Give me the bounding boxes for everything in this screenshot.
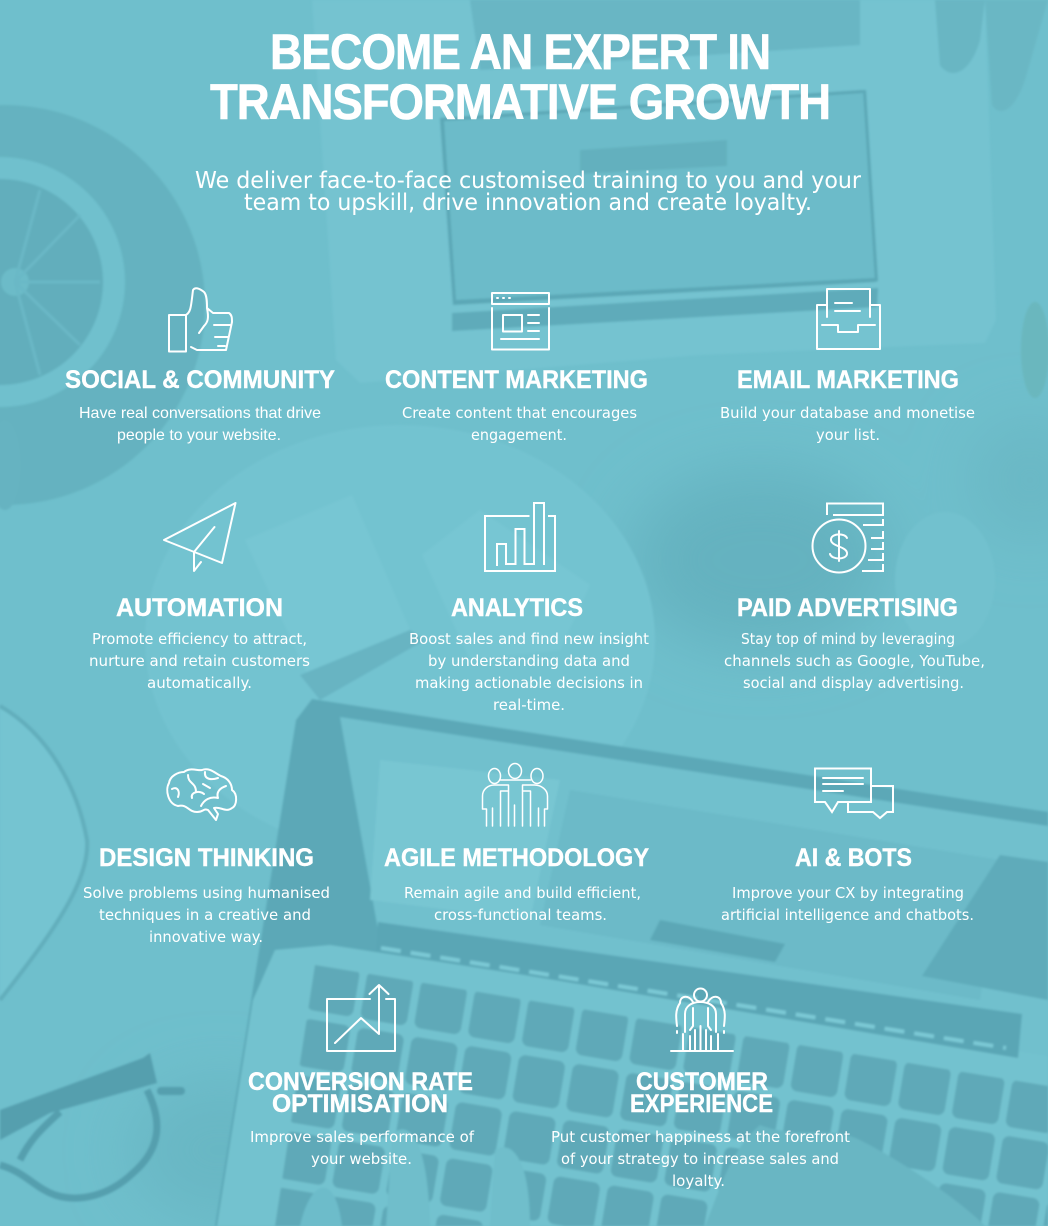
heading: SOCIAL & COMMUNITY xyxy=(65,366,335,394)
heading: AUTOMATION xyxy=(116,594,283,622)
icon: team of people xyxy=(482,764,548,826)
panel: automation xyxy=(89,503,310,692)
description: social and display advertising. xyxy=(743,674,964,692)
description: nurture and retain customers xyxy=(89,652,310,670)
description xyxy=(724,630,985,692)
panel: social & community xyxy=(65,288,335,444)
panel: agile methodology xyxy=(384,764,649,924)
icon: paper plane xyxy=(164,503,236,571)
heading: CONVERSION RATE xyxy=(248,1068,473,1096)
icon: thumbs up xyxy=(169,288,232,352)
description: Improve your CX by integrating xyxy=(732,884,964,902)
description: by understanding data and xyxy=(428,652,630,670)
icon: brain xyxy=(167,769,236,820)
description: Stay top of mind by leveraging xyxy=(741,630,955,648)
description: Improve sales performance of xyxy=(250,1128,475,1146)
coffee ring xyxy=(895,512,995,648)
description: cross-functional teams. xyxy=(434,906,607,924)
description: making actionable decisions in xyxy=(415,674,643,692)
icon: inbox tray xyxy=(817,289,880,349)
title xyxy=(210,24,830,130)
description: real-time. xyxy=(493,696,565,714)
panel: ai & bots xyxy=(721,768,974,924)
heading xyxy=(630,1068,773,1118)
description: Promote efficiency to attract, xyxy=(92,630,307,648)
description xyxy=(404,884,641,924)
description: innovative way. xyxy=(149,928,263,946)
description: Build your database and monetise xyxy=(720,404,975,422)
heading: EXPERIENCE xyxy=(630,1090,773,1118)
glasses xyxy=(0,1053,157,1140)
heading: EMAIL MARKETING xyxy=(737,366,959,394)
description: of your strategy to increase sales and xyxy=(561,1150,839,1168)
description xyxy=(720,404,975,444)
icon: growth arrow chart xyxy=(327,985,395,1051)
icon: customer group xyxy=(671,988,733,1051)
fingers and leaves top right xyxy=(935,0,985,73)
subtitle: We deliver face-to-face customised training to you and your xyxy=(195,168,862,194)
description xyxy=(721,884,974,924)
description: channels such as Google, YouTube, xyxy=(724,652,985,670)
description: Create content that encourages xyxy=(402,404,637,422)
description: Have real conversations that drive xyxy=(79,405,321,422)
description xyxy=(89,630,310,692)
description xyxy=(551,1128,850,1190)
lower laptop xyxy=(215,699,1048,1226)
heading: DESIGN THINKING xyxy=(99,844,314,872)
description: Solve problems using humanised xyxy=(83,884,330,902)
heading: AI & BOTS xyxy=(795,844,912,872)
panel: design thinking xyxy=(83,769,330,946)
heading: ANALYTICS xyxy=(451,594,583,622)
description xyxy=(250,1128,475,1168)
heading: AGILE METHODOLOGY xyxy=(384,844,649,872)
panel: paid advertising xyxy=(724,504,985,692)
heading: CUSTOMER xyxy=(636,1068,768,1096)
description xyxy=(409,630,649,714)
hands xyxy=(300,1188,342,1226)
icon: dollar coin xyxy=(812,504,883,572)
panel: conversion rate optimisation xyxy=(248,985,475,1168)
plate and brownies xyxy=(145,425,655,855)
panel: analytics xyxy=(409,503,649,714)
description: your list. xyxy=(816,426,880,444)
glass xyxy=(0,706,87,1000)
description: Put customer happiness at the forefront xyxy=(551,1128,850,1146)
description: automatically. xyxy=(147,674,252,692)
soft wood shading xyxy=(130,420,1048,1220)
description: engagement. xyxy=(471,426,567,444)
icon: web page xyxy=(492,293,549,350)
icon: bar chart xyxy=(485,503,555,571)
upper laptop xyxy=(312,0,996,383)
panel: email marketing xyxy=(720,289,975,444)
description: artificial intelligence and chatbots. xyxy=(721,906,974,924)
panel: customer experience xyxy=(551,988,850,1190)
description: techniques in a creative and xyxy=(99,906,311,924)
description xyxy=(79,405,321,444)
heading: CONTENT MARKETING xyxy=(385,366,648,394)
panel: content marketing xyxy=(385,293,648,444)
description: Remain agile and build efficient, xyxy=(404,884,641,902)
description xyxy=(83,884,330,946)
description: loyalty. xyxy=(672,1172,725,1190)
heading xyxy=(248,1068,473,1118)
description xyxy=(402,404,637,444)
icon: chat bubbles xyxy=(815,768,893,818)
title: BECOME AN EXPERT IN xyxy=(270,24,770,80)
coaster and lemon cup xyxy=(0,105,205,505)
title: TRANSFORMATIVE GROWTH xyxy=(210,74,830,130)
description: your website. xyxy=(311,1150,412,1168)
heading: PAID ADVERTISING xyxy=(737,594,958,622)
heading: OPTIMISATION xyxy=(272,1090,448,1118)
subtitle xyxy=(195,168,862,216)
description: people to your website. xyxy=(117,427,281,444)
subtitle: team to upskill, drive innovation and create loyalty. xyxy=(244,190,812,216)
description: Boost sales and find new insight xyxy=(409,630,649,648)
